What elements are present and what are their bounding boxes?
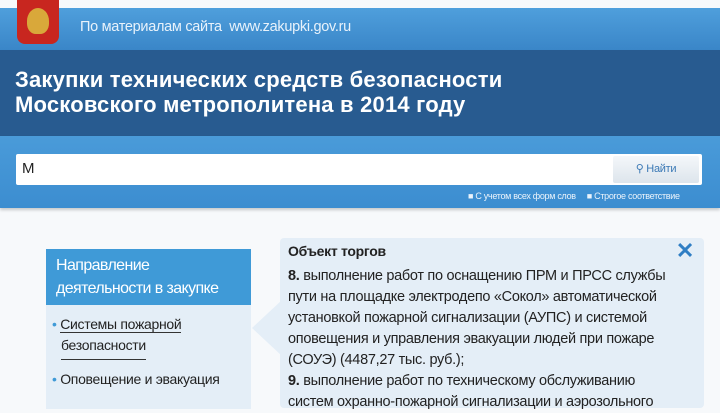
search button (613, 156, 699, 183)
panel: left category (46, 249, 251, 409)
left header: деятельности в закупке (56, 280, 218, 297)
search box: М (22, 160, 34, 177)
left header: Направление (56, 257, 149, 274)
arrow pointer (252, 300, 282, 356)
panel body text: систем охранно-пожарной сигнализации и аэрозольного (288, 394, 653, 410)
close icon: ✕ (676, 238, 694, 263)
search band (0, 136, 720, 208)
title: Московского метрополитена в 2014 году (15, 92, 465, 117)
search box (16, 154, 702, 185)
title: Закупки технических средств безопасности (15, 67, 502, 92)
list item 2: • Оповещение и эвакуация (52, 371, 220, 387)
title band (0, 50, 720, 136)
panel body text: пути на площадке электродепо «Сокол» автоматической (288, 289, 657, 305)
icon: emblem (17, 0, 59, 44)
panel body text (288, 268, 665, 410)
list item 1: • Системы пожарной (52, 316, 181, 332)
panel: trade object (280, 238, 704, 408)
top header band (0, 8, 720, 50)
panel body text: (СОУЭ) (4487,27 тыс. руб.); (288, 352, 464, 368)
left header (46, 249, 251, 305)
panel body text: оповещения и управления эвакуации людей при пожаре (288, 331, 654, 347)
list item 1 (52, 316, 181, 360)
panel body text: 8. выполнение работ по оснащению ПРМ и ПРСС службы (288, 268, 665, 284)
panel body text: установкой пожарной сигнализации (АУПС) и системой (288, 310, 647, 326)
panel body text: 9. выполнение работ по техническому обслуживанию (288, 373, 635, 389)
search button: ⚲ Найти (636, 163, 676, 175)
list item 1: безопасности (61, 337, 146, 353)
panel heading: Объект торгов (288, 243, 386, 259)
source text: По материалам сайта www.zakupki.gov.ru (80, 19, 351, 35)
search options: ■ С учетом всех форм слов ■ Строгое соответствие (468, 191, 680, 201)
title (15, 67, 502, 117)
